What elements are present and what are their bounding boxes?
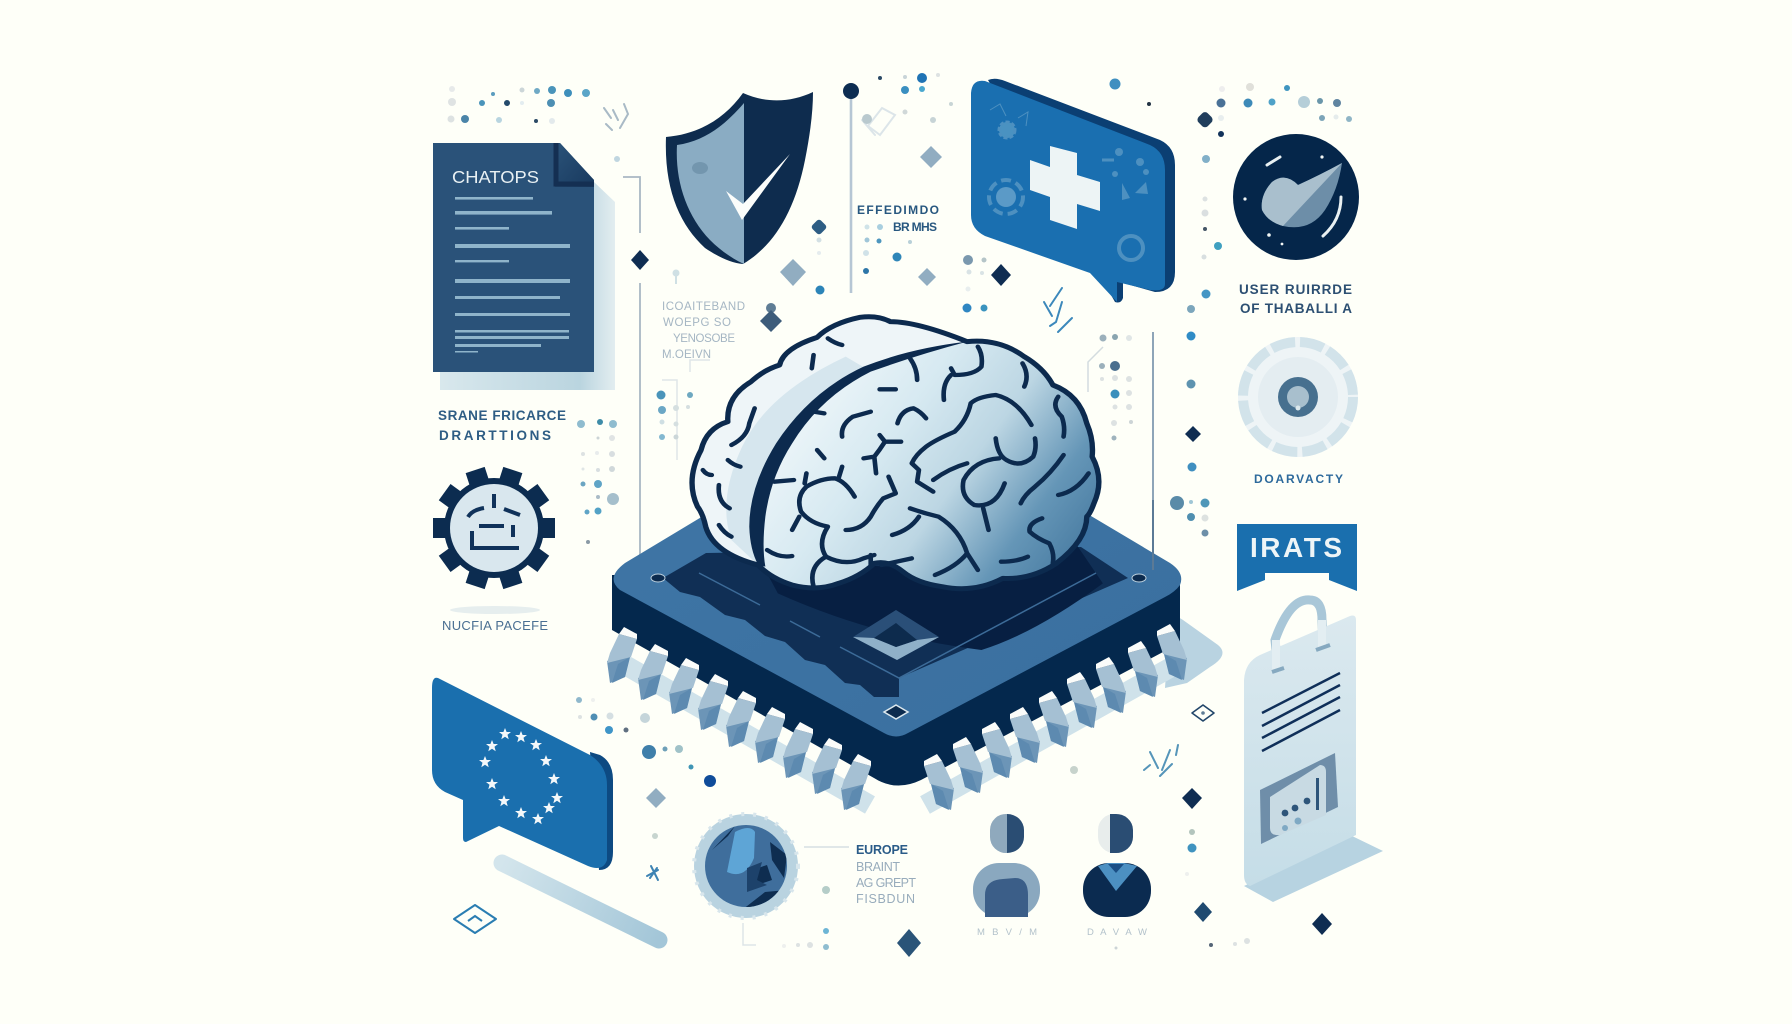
label: user rule <box>1239 282 1352 316</box>
chip top surface <box>614 400 1181 736</box>
dot field <box>448 73 1352 950</box>
label: user rule: OF THABALLI A <box>1240 301 1352 316</box>
squiggle glyph clusters <box>604 104 1178 880</box>
label: knowledge note: WOEPG SO <box>663 317 731 329</box>
document fold <box>555 143 594 187</box>
chip <box>607 400 1187 810</box>
label: europe: AG GREPT <box>856 876 916 890</box>
chip body <box>612 575 1180 786</box>
label: europe: BRAINT <box>856 860 900 874</box>
left pins <box>607 627 871 810</box>
connector lines <box>623 97 1153 945</box>
icon: privacy dial <box>1238 337 1358 457</box>
gauge dial <box>1262 163 1342 227</box>
icon: globe <box>694 814 798 918</box>
brain front hemisphere <box>756 341 1099 589</box>
document text lines <box>455 197 570 352</box>
label: knowledge note: YENOSOBE <box>673 333 735 345</box>
EU stars <box>479 728 563 824</box>
icon: lock marker <box>760 303 782 332</box>
panel: chatops document <box>433 143 615 390</box>
tag handle front <box>1276 620 1322 672</box>
icon: gear <box>433 467 555 589</box>
label: user rule: USER RUIRRDE <box>1239 282 1352 297</box>
document page <box>433 143 594 372</box>
tag handle back <box>1275 600 1323 668</box>
label: effective: BR MHS <box>893 220 937 234</box>
icon: location pin <box>672 270 680 284</box>
tag body <box>1244 616 1356 886</box>
brain shadow <box>762 547 1103 650</box>
label: knowledge note <box>662 301 745 361</box>
chip shadow <box>1165 612 1222 688</box>
bubble face <box>971 81 1165 302</box>
icon: shield with check <box>666 92 813 264</box>
label: operations <box>438 408 566 443</box>
labels: persons: D A V A W <box>1087 927 1147 938</box>
gear shadow <box>450 606 540 614</box>
pale diamonds <box>646 146 942 808</box>
icon: banner irats <box>1237 524 1357 591</box>
cross <box>1030 146 1100 229</box>
tag foot <box>1244 835 1383 902</box>
label: europe: EUROPE <box>856 843 908 857</box>
icon: person right <box>1083 814 1151 917</box>
panel outline <box>699 573 1096 678</box>
labels: persons <box>977 927 1147 938</box>
brain back hemisphere <box>692 317 967 565</box>
bubble glyphs <box>989 104 1149 260</box>
gauge highlights <box>1267 157 1280 165</box>
label: europe <box>856 843 916 906</box>
label: effective: EFFEDIMDO <box>857 203 939 217</box>
label: operations: DRARTTIONS <box>439 428 551 443</box>
chip front overlap line <box>1152 500 1154 570</box>
label: effective <box>857 203 939 234</box>
label: knowledge note: M.OEIVN <box>662 349 711 361</box>
label: europe: FISBDUN <box>856 892 915 906</box>
right pins <box>924 624 1187 810</box>
pin shadows <box>625 665 1175 805</box>
icon: person left <box>973 814 1040 917</box>
icon: hanging tag <box>1244 600 1383 902</box>
brain <box>692 317 1103 650</box>
icon: navy gauge circle <box>1233 134 1359 260</box>
brain central fissure <box>749 342 967 567</box>
icon: eye badge <box>1192 705 1214 721</box>
label: nucfia pacefe: NUCFIA PACEFE <box>442 618 548 633</box>
inner dark panel <box>663 547 1128 697</box>
center square marking <box>853 610 939 660</box>
label: privacy: DOARVACTY <box>1254 472 1343 486</box>
icon: EU speech bubble <box>432 678 613 870</box>
label: operations: SRANE FRICARCE <box>438 408 566 423</box>
icon: small chevron badge <box>454 905 496 933</box>
tag lines <box>1262 673 1340 751</box>
icon: medical speech bubble <box>971 79 1175 302</box>
document shadow <box>440 182 615 390</box>
brain outline <box>692 317 1099 589</box>
labels: persons: M B V / M <box>977 927 1037 938</box>
document title: CHATOPS <box>452 167 539 187</box>
decorative pill <box>502 863 659 940</box>
icon: banner irats: IRATS <box>1250 532 1342 563</box>
tag mini card <box>1260 753 1338 844</box>
bubble side <box>988 79 1175 302</box>
brain sulci <box>703 338 1089 587</box>
corner holes <box>1132 574 1146 582</box>
label: knowledge note: ICOAITEBAND <box>662 301 745 313</box>
navy diamonds <box>631 111 1332 957</box>
